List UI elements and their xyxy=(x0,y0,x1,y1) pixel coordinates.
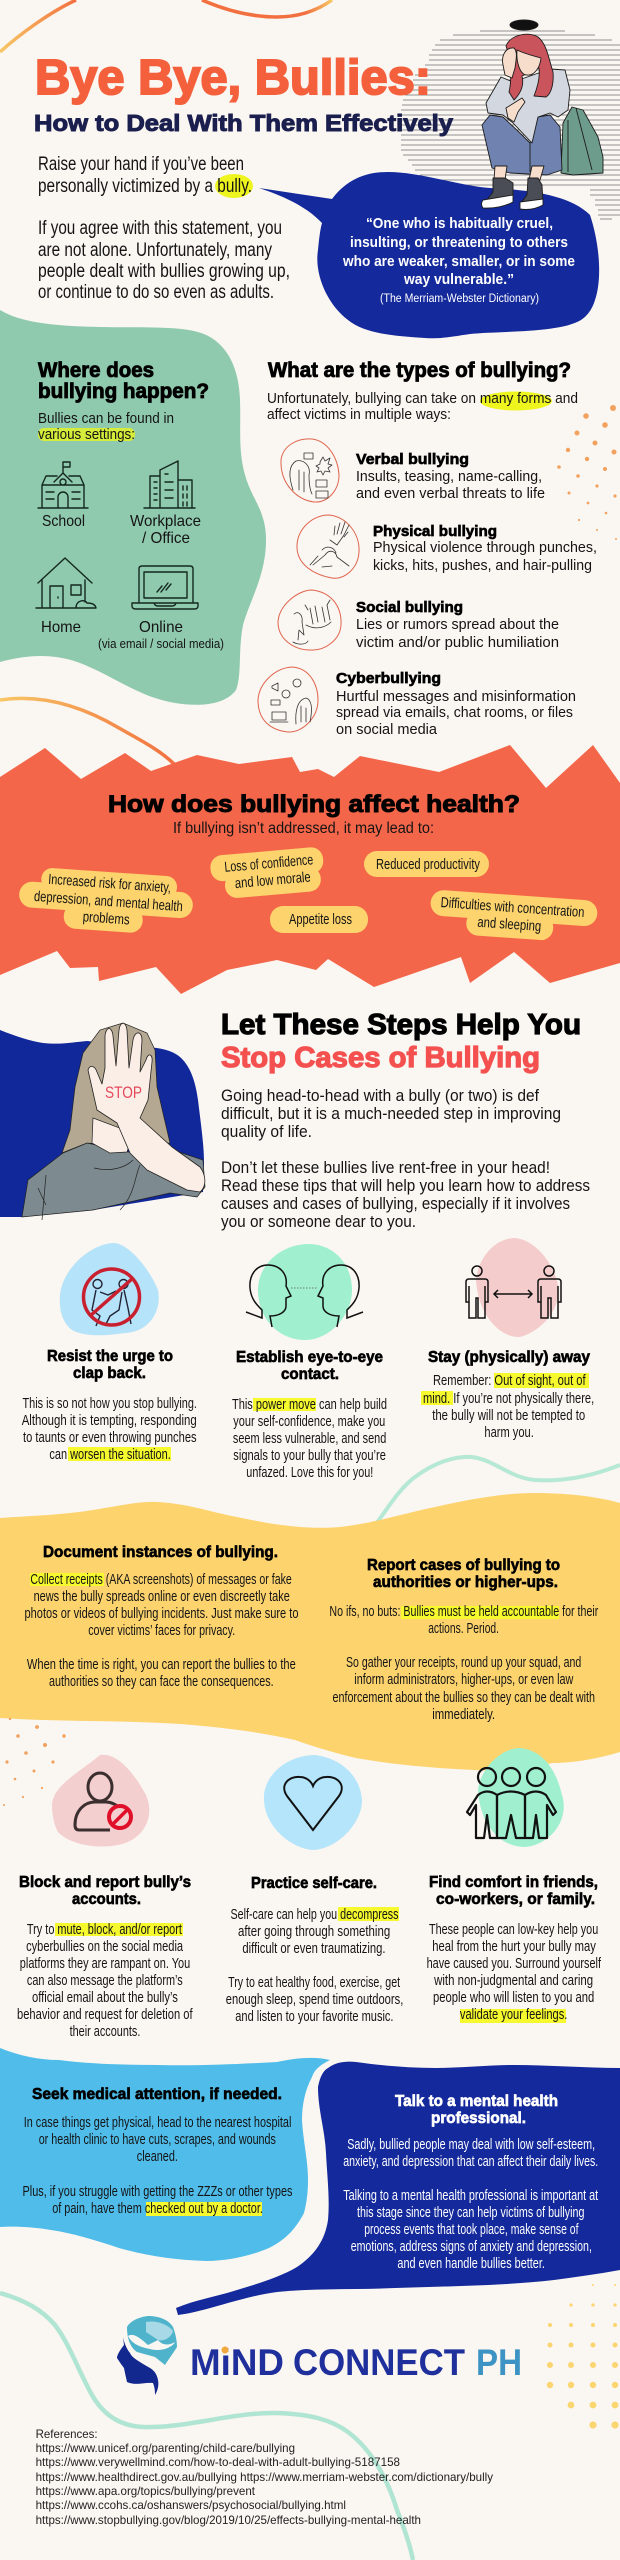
decorative mint swoosh lower xyxy=(0,2293,413,2560)
intro text: personally victimized by a bully. xyxy=(38,176,252,197)
intro xyxy=(267,390,578,423)
step: find comfort: validate your feelings. xyxy=(460,2006,567,2023)
verbal text: and even verbal threats to life xyxy=(356,485,545,502)
intro text: If you agree with this statement, you xyxy=(38,218,282,239)
title: How to Deal With Them Effectively xyxy=(34,110,453,136)
office label xyxy=(130,513,201,547)
icon: physical xyxy=(297,515,359,578)
social text: victim and/or public humiliation xyxy=(356,634,559,651)
step: block and report: platforms they are rampant on. You xyxy=(20,1955,190,1972)
wordmark connect: CONNECT xyxy=(293,2342,465,2383)
illustration: person showing stop hand xyxy=(0,1023,205,1220)
step: block and report: accounts. xyxy=(72,1891,141,1908)
pill: appetite: Appetite loss xyxy=(289,912,352,928)
steps heading: Stop Cases of Bullying xyxy=(221,1042,540,1074)
step: eye contact: Establish eye-to-eye xyxy=(236,1349,383,1366)
quote text: insulting, or threatening to others xyxy=(350,234,568,251)
sweater xyxy=(486,69,570,143)
pill: confidence: and low morale xyxy=(234,870,311,892)
hand on head xyxy=(503,48,516,78)
home label: Home xyxy=(41,619,81,636)
step: eye contact: contact. xyxy=(281,1366,339,1383)
step: stay away: harm you. xyxy=(484,1424,534,1441)
panel: seek medical attention: of pain, have them checked out by a doctor. xyxy=(52,2200,263,2217)
document heading and text: Collect receipts (AKA screenshots) of messages or fake xyxy=(30,1571,292,1588)
pill: confidence xyxy=(209,846,326,900)
intro text: or continue to do so even as adults. xyxy=(38,282,274,303)
icon: head with hands xyxy=(117,2316,177,2395)
logo: Mind Connect PH xyxy=(117,2316,522,2395)
social text xyxy=(356,599,559,651)
panel: seek medical attention: cleaned. xyxy=(137,2148,178,2165)
pill: anxiety risk xyxy=(17,866,195,937)
intro text: people dealt with bullies growing up, xyxy=(38,261,290,282)
intro text: are not alone. Unfortunately, many xyxy=(38,240,272,261)
quote bubble xyxy=(259,172,599,338)
icon: social xyxy=(278,590,341,650)
step: resist: can worsen the situation. xyxy=(49,1446,171,1463)
step: block and report: Try to mute, block, and/or report xyxy=(27,1921,182,1938)
icon: laptop xyxy=(132,566,198,609)
office label: / Office xyxy=(142,530,190,547)
title xyxy=(34,51,453,136)
report heading and text: immediately. xyxy=(432,1706,495,1723)
online label: Online xyxy=(139,619,183,636)
step: self-care: Try to eat healthy food, exercise, get xyxy=(228,1974,401,1991)
step: resist: Resist the urge to xyxy=(47,1348,173,1365)
quote text: who are weaker, smaller, or in some xyxy=(342,253,575,270)
pill: anxiety risk: Increased risk for anxiety, xyxy=(48,872,172,896)
online label xyxy=(98,619,224,651)
pill: concentration xyxy=(429,889,598,944)
pill: concentration: and sleeping xyxy=(477,915,542,935)
report heading and text xyxy=(329,1557,598,1723)
pants xyxy=(482,115,562,175)
step: resist: to taunts or even throwing punches xyxy=(23,1429,197,1446)
online label: (via email / social media) xyxy=(98,637,224,651)
references: https://www.apa.org/topics/bullying/prevent xyxy=(36,2484,256,2498)
physical text: Physical violence through punches, xyxy=(373,539,597,556)
step: block and report: official email about the bully’s xyxy=(32,1989,178,2006)
icon: no fighting xyxy=(60,1243,159,1335)
panel: seek medical attention: Seek medical attention, if needed. xyxy=(32,2086,282,2103)
heading: How does bullying affect health? xyxy=(108,791,520,818)
step: self-care: difficult or even traumatizing. xyxy=(242,1940,386,1957)
references: https://www.healthdirect.gov.au/bullying https://www.merriam-webster.com/dictionary/bully xyxy=(36,2470,493,2484)
step: eye contact: seem less vulnerable, and send xyxy=(233,1430,386,1447)
icon: school xyxy=(38,462,88,508)
subheading: If bullying isn’t addressed, it may lead to: xyxy=(173,820,434,837)
steps intro text: Read these tips that will help you learn how to address xyxy=(221,1177,590,1195)
panel: types of bullying xyxy=(258,359,597,738)
illustration: girl's shoes xyxy=(482,166,544,210)
cyberbullying text: spread via emails, chat rooms, or files xyxy=(336,704,573,721)
step: eye contact: signals to your bully that you’re xyxy=(233,1447,386,1464)
office label: Workplace xyxy=(130,513,201,530)
document heading and text: news the bully spreads online or even discreetly take xyxy=(34,1588,290,1605)
step: eye contact: your self-confidence, make you xyxy=(233,1413,385,1430)
step: block and report: cyberbullies on the social media xyxy=(26,1938,184,1955)
heading: bullying happen? xyxy=(38,380,209,403)
document heading and text: Document instances of bullying. xyxy=(43,1544,278,1561)
references: References: xyxy=(36,2427,98,2441)
social text: Social bullying xyxy=(356,599,463,616)
illustration: sad girl on stairs, upper body xyxy=(482,20,603,175)
steps intro text: Don’t let these bullies live rent-free in your head! xyxy=(221,1159,550,1177)
step: self-care: enough sleep, spend time outdoors, xyxy=(226,1991,403,2008)
face xyxy=(517,50,541,75)
step: resist xyxy=(22,1348,197,1463)
hair xyxy=(506,34,553,100)
document heading and text: photos or videos of bullying incidents. Just make sure to xyxy=(24,1605,298,1622)
wordmark ph: PH xyxy=(476,2342,522,2383)
panel: seek medical attention xyxy=(0,2048,330,2261)
step: eye contact xyxy=(232,1349,387,1481)
quote text: way vulnerable.” xyxy=(403,271,514,288)
intro: Bullies can be found in xyxy=(38,410,174,427)
document heading and text xyxy=(24,1544,298,1690)
intro xyxy=(38,410,174,443)
references: https://www.unicef.org/parenting/child-care/bullying xyxy=(36,2441,295,2455)
panel: where does bullying happen xyxy=(0,310,266,705)
physical text: Physical bullying xyxy=(373,523,497,540)
social text: Lies or rumors spread about the xyxy=(356,616,559,633)
decorative yellow dots xyxy=(547,2284,619,2429)
step: resist: This is so not how you stop bullying. xyxy=(22,1395,197,1412)
heading xyxy=(38,359,209,403)
step: self-care xyxy=(226,1875,403,2025)
panel: talk to a mental health professional xyxy=(176,2062,620,2315)
steps intro text: quality of life. xyxy=(221,1123,312,1141)
resting hand xyxy=(506,98,525,122)
decorative orange swoosh xyxy=(0,698,174,764)
references: https://www.verywellmind.com/how-to-deal-with-adult-bullying-5187158 xyxy=(36,2455,400,2469)
intro: Unfortunately, bullying can take on many forms and xyxy=(267,390,578,407)
physical text: kicks, hits, pushes, and hair-pulling xyxy=(373,557,592,574)
pill: confidence: Loss of confidence xyxy=(224,852,314,876)
panel: seek medical attention: or health clinic to have cuts, scrapes, and wounds xyxy=(39,2131,276,2148)
icon: physical distance xyxy=(466,1238,561,1337)
references xyxy=(36,2427,493,2527)
i dot xyxy=(222,2346,228,2354)
decorative top swooshes xyxy=(0,0,332,52)
pill: anxiety risk: problems xyxy=(82,909,130,929)
document heading and text: When the time is right, you can report the bullies to the xyxy=(27,1656,296,1673)
panel: yellow documents and reports xyxy=(0,1493,620,1771)
panel: seek medical attention: Plus, if you struggle with getting the ZZZs or other types xyxy=(22,2183,292,2200)
steps intro text: causes and cases of bullying, especially if it involves xyxy=(221,1195,570,1213)
step: eye contact: unfazed. Love this for you! xyxy=(246,1464,373,1481)
heading: Where does xyxy=(38,359,154,382)
panel: seek medical attention: In case things get physical, head to the nearest hospital xyxy=(24,2114,291,2131)
heading: What are the types of bullying? xyxy=(268,359,571,382)
report heading and text: authorities or higher-ups. xyxy=(373,1574,558,1591)
steps heading xyxy=(221,1009,581,1074)
verbal text: Insults, teasing, name-calling, xyxy=(356,468,542,485)
physical text xyxy=(373,523,597,574)
step: block and report: can also message the platform’s xyxy=(27,1972,183,1989)
quote text xyxy=(342,215,575,305)
references: https://www.stopbullying.gov/blog/2019/10/25/effects-bullying-mental-health xyxy=(36,2513,421,2527)
step: block and report: Block and report bully’s xyxy=(19,1874,191,1891)
icon: verbal xyxy=(281,439,339,502)
icon: stress scribble xyxy=(510,20,538,30)
icon: friends group xyxy=(467,1748,564,1847)
decorative mint swoosh xyxy=(376,1457,620,1524)
icon: heart self-care xyxy=(264,1755,362,1850)
cyberbullying text: on social media xyxy=(336,721,438,738)
step: stay away xyxy=(421,1349,594,1441)
hand label: STOP xyxy=(105,1083,142,1102)
report heading and text: Report cases of bullying to xyxy=(367,1557,560,1574)
icon: eye contact xyxy=(246,1244,363,1340)
step: stay away: Stay (physically) away xyxy=(428,1349,590,1366)
step: self-care: Practice self-care. xyxy=(251,1875,377,1892)
step: block and report: behavior and request for deletion of xyxy=(17,2006,193,2023)
panel: talk to a mental health professional: Talk to a mental health xyxy=(395,2093,558,2110)
step: self-care: Self-care can help you decompress xyxy=(230,1906,398,1923)
step: find comfort xyxy=(427,1874,602,2023)
icon: home xyxy=(36,558,96,608)
quote text: (The Merriam-Webster Dictionary) xyxy=(380,293,539,305)
steps intro text: you or someone dear to you. xyxy=(221,1213,416,1231)
decorative orange dots lower xyxy=(3,1718,66,1806)
intro text: Raise your hand if you’ve been xyxy=(38,154,244,175)
step: eye contact: This power move can help build xyxy=(232,1396,387,1413)
intro text xyxy=(38,154,290,303)
verbal text: Verbal bullying xyxy=(356,451,469,468)
quote text: “One who is habitually cruel, xyxy=(366,215,553,232)
report heading and text: actions. Period. xyxy=(428,1620,499,1637)
pill: appetite xyxy=(270,906,368,933)
decorative orange dots xyxy=(557,405,617,540)
intro: affect victims in multiple ways: xyxy=(267,406,451,423)
step: block and report xyxy=(17,1874,193,2040)
backpack xyxy=(561,107,603,175)
cyberbullying text xyxy=(336,670,576,738)
intro: various settings: xyxy=(38,426,135,443)
step: self-care: after going through something xyxy=(238,1923,390,1940)
verbal text xyxy=(356,451,545,502)
icon: office xyxy=(144,461,195,508)
step: find comfort: Find comfort in friends, xyxy=(429,1874,598,1891)
document heading and text: authorities so they can face the consequences. xyxy=(49,1673,274,1690)
cyberbullying text: Cyberbullying xyxy=(336,670,441,687)
title: Bye Bye, Bullies: xyxy=(35,51,431,105)
step: self-care: and listen to your favorite music. xyxy=(235,2008,394,2025)
step: block and report: their accounts. xyxy=(70,2023,140,2040)
steps heading: Let These Steps Help You xyxy=(221,1009,581,1041)
step: resist: Although it is tempting, responding xyxy=(22,1412,197,1429)
pill: anxiety risk: depression, and mental health xyxy=(33,889,183,915)
document heading and text: cover victims’ faces for privacy. xyxy=(88,1622,235,1639)
panel: talk to a mental health professional: and even handle bullies better. xyxy=(397,2255,545,2272)
step: resist: clap back. xyxy=(73,1365,146,1382)
steps intro text: Going head-to-head with a bully (or two) is def xyxy=(221,1087,539,1105)
panel: talk to a mental health professional: professional. xyxy=(431,2110,526,2127)
steps intro text xyxy=(221,1087,590,1231)
steps intro text: difficult, but it is a much-needed step in improving xyxy=(221,1105,561,1123)
wordmark: MiND xyxy=(190,2342,284,2383)
cyberbullying text: Hurtful messages and misinformation xyxy=(336,688,576,705)
pill: productivity: Reduced productivity xyxy=(376,857,481,873)
school label: School xyxy=(42,513,85,530)
icon: cyberbullying xyxy=(258,667,318,732)
staircase background lines xyxy=(401,31,620,219)
pill: productivity xyxy=(364,851,489,877)
references: https://www.ccohs.ca/oshanswers/psychosocial/bullying.html xyxy=(36,2498,346,2512)
panel: health effects xyxy=(0,745,620,994)
step: find comfort: co-workers, or family. xyxy=(436,1891,595,1908)
icon: block account xyxy=(52,1755,149,1847)
